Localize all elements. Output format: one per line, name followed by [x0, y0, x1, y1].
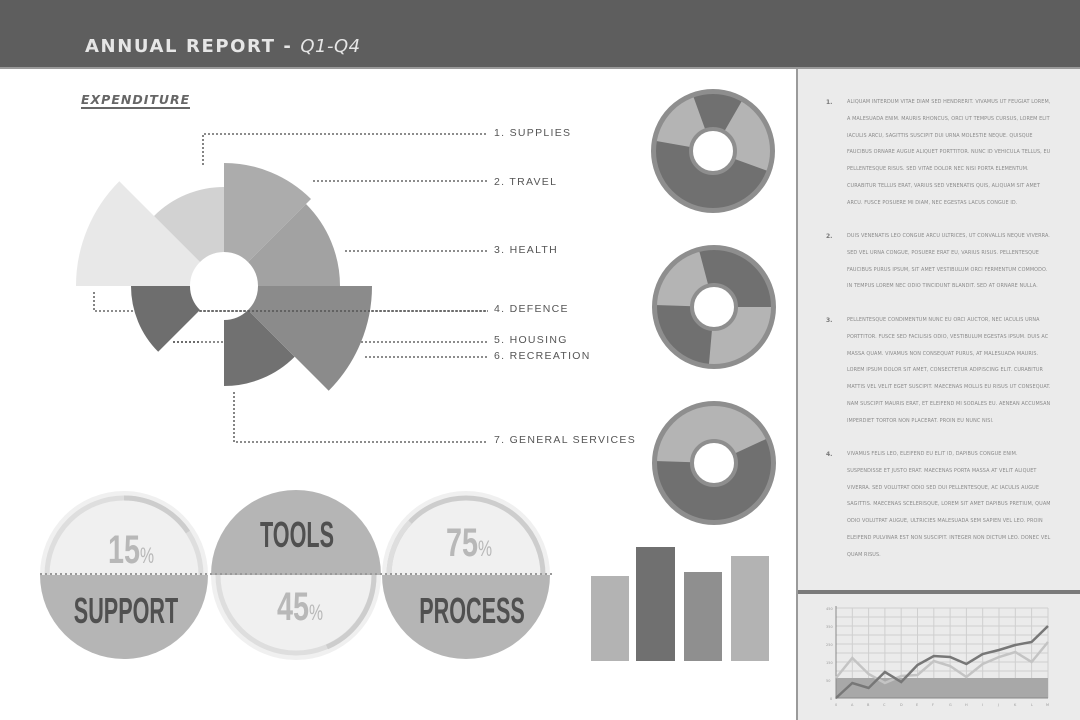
donut 3	[654, 404, 774, 522]
category labels: 1. SUPPLIES	[494, 127, 571, 139]
text block 2: DUIS VENENATIS LEO CONGUE ARCU ULTRICES, UT CONVALLIS NEQUE VIVERRA. SED VEL URNA CONGUE, POSUERE ERAT EU, VARIUS RISUS. PELLENTESQUE FAUCIBUS PURUS IPSUM, SIT AMET VESTIBULUM ORCI FERMENTUM COMMODO. IN TEMPUS LOREM NEC ODIO TINCIDUNT BLANDIT. SED AT ORNARE NULLA.	[847, 233, 1050, 289]
donut 2	[654, 248, 774, 366]
line chart: H	[965, 703, 968, 707]
line chart: 350	[826, 625, 833, 629]
line chart: I	[982, 703, 983, 707]
category labels: 7. GENERAL SERVICES	[494, 434, 636, 446]
circle: process 75%: 75	[446, 520, 478, 565]
heading: expenditure: EXPENDITURE	[81, 92, 190, 107]
title: ANNUAL REPORT - Q1-Q4	[85, 36, 361, 57]
leader lines	[94, 134, 488, 442]
category labels: 5. HOUSING	[494, 334, 568, 346]
category labels: 6. RECREATION	[494, 350, 591, 362]
circle: tools 45%: TOOLS	[260, 515, 334, 555]
line chart: 50	[826, 679, 830, 683]
line chart: J	[997, 703, 999, 707]
rose chart	[76, 163, 488, 391]
donut 1	[654, 92, 772, 210]
header bar	[0, 0, 1080, 69]
circle: support 15%: %	[140, 545, 154, 569]
circle: support 15%	[40, 491, 208, 659]
line chart: A	[851, 703, 854, 707]
line chart: F	[932, 703, 934, 707]
line chart: B	[867, 703, 870, 707]
circle: process 75%: %	[478, 538, 492, 562]
text block 2: 2.	[826, 233, 832, 240]
line chart: C	[883, 703, 886, 707]
text block 4: VIVAMUS FELIS LEO, ELEIFEND EU ELIT ID, DAPIBUS CONGUE ENIM. SUSPENDISSE ET JUSTO ERAT. MAECENAS PORTA MASSA AT VELIT ALIQUET VIVERRA. SED VOLUTPAT ODIO SED DUI PELLENTESQUE, AC IACULIS AUGUE SAGITTIS. MAECENAS SCELERISQUE, LOREM SIT AMET DAPIBUS PRETIUM, QUAM ODIO VOLUTPAT AUGUE, ULTRICIES MALESUADA SEM SAPIEN VEL LEO. PROIN ELEIFEND PULVINAR EST NON SUSCIPIT. INTEGER NON DICTUM LEO. DONEC VEL QUAM RISUS.	[847, 451, 1051, 558]
circle: tools 45%: 45	[277, 584, 309, 629]
line chart: D	[900, 703, 903, 707]
line chart	[826, 606, 1049, 707]
category labels: 4. DEFENCE	[494, 303, 569, 315]
text block 4: 4.	[826, 451, 832, 458]
line chart: 450	[826, 607, 833, 611]
circle: support 15%: SUPPORT	[74, 591, 178, 631]
category labels: 2. TRAVEL	[494, 176, 557, 188]
circle: tools 45%	[211, 490, 381, 660]
text block 3: PELLENTESQUE CONDIMENTUM NUNC EU ORCI AUCTOR, NEC IACULIS URNA PORTTITOR. FUSCE SED FACILISIS ODIO, VESTIBULUM EGESTAS IPSUM. DUIS AC MASSA QUAM. VIVAMUS NON CONSEQUAT PURUS, AT MALESUADA MAURIS. LOREM IPSUM DOLOR SIT AMET, CONSECTETUR ADIPISCING ELIT. CURABITUR MATTIS VEL VELIT EGET SUSCIPIT. MAECENAS MOLLIS EU RISUS UT CONSEQUAT. NAM SUSCIPIT MAURIS ERAT, ET ELEIFEND MI SODALES EU. AENEAN ACCUMSAN IMPERDIET TORTOR NON PLACERAT. PROIN EU NUNC NISI.	[847, 317, 1051, 424]
line chart: 0	[830, 697, 832, 701]
line chart: K	[1014, 703, 1017, 707]
line chart: L	[1031, 703, 1033, 707]
line chart: 0	[835, 703, 837, 707]
line chart: 150	[826, 661, 833, 665]
circle: tools 45%: %	[309, 602, 323, 626]
text block 1: ALIQUAM INTERDUM VITAE DIAM SED HENDRERIT. VIVAMUS UT FEUGIAT LOREM, A MALESUADA ENIM. MAURIS RHONCUS, ORCI UT TEMPUS CURSUS, LOREM ELIT IACULIS ARCU, SAGITTIS SUSCIPIT DUI URNA MOLESTIE NEQUE. QUISQUE FAUCIBUS ORNARE AUGUE ALIQUET PORTTITOR. NUNC ID VEHICULA TELLUS, EU PELLENTESQUE RISUS. SED VITAE DOLOR NEC NISI PORTA ELEMENTUM. CURABITUR TELLUS ERAT, VARIUS SED VENENATIS QUIS, ALIQUAM SIT AMET ARCU. FUSCE POSUERE MI DIAM, NEC EGESTAS LACUS CONGUE ID.	[847, 99, 1050, 206]
line chart: 250	[826, 643, 833, 647]
line chart: M	[1046, 703, 1049, 707]
right panel	[796, 69, 1080, 720]
circle: process 75%: PROCESS	[419, 591, 525, 631]
text block 1: 1.	[826, 99, 832, 106]
line chart: G	[949, 703, 952, 707]
divider right panel	[798, 590, 1080, 594]
circle: process 75%	[382, 491, 550, 659]
category labels	[494, 127, 636, 446]
circle: support 15%: 15	[108, 527, 140, 572]
text block 3: 3.	[826, 317, 832, 324]
bar chart	[591, 547, 769, 661]
line chart: E	[916, 703, 918, 707]
category labels: 3. HEALTH	[494, 244, 558, 256]
